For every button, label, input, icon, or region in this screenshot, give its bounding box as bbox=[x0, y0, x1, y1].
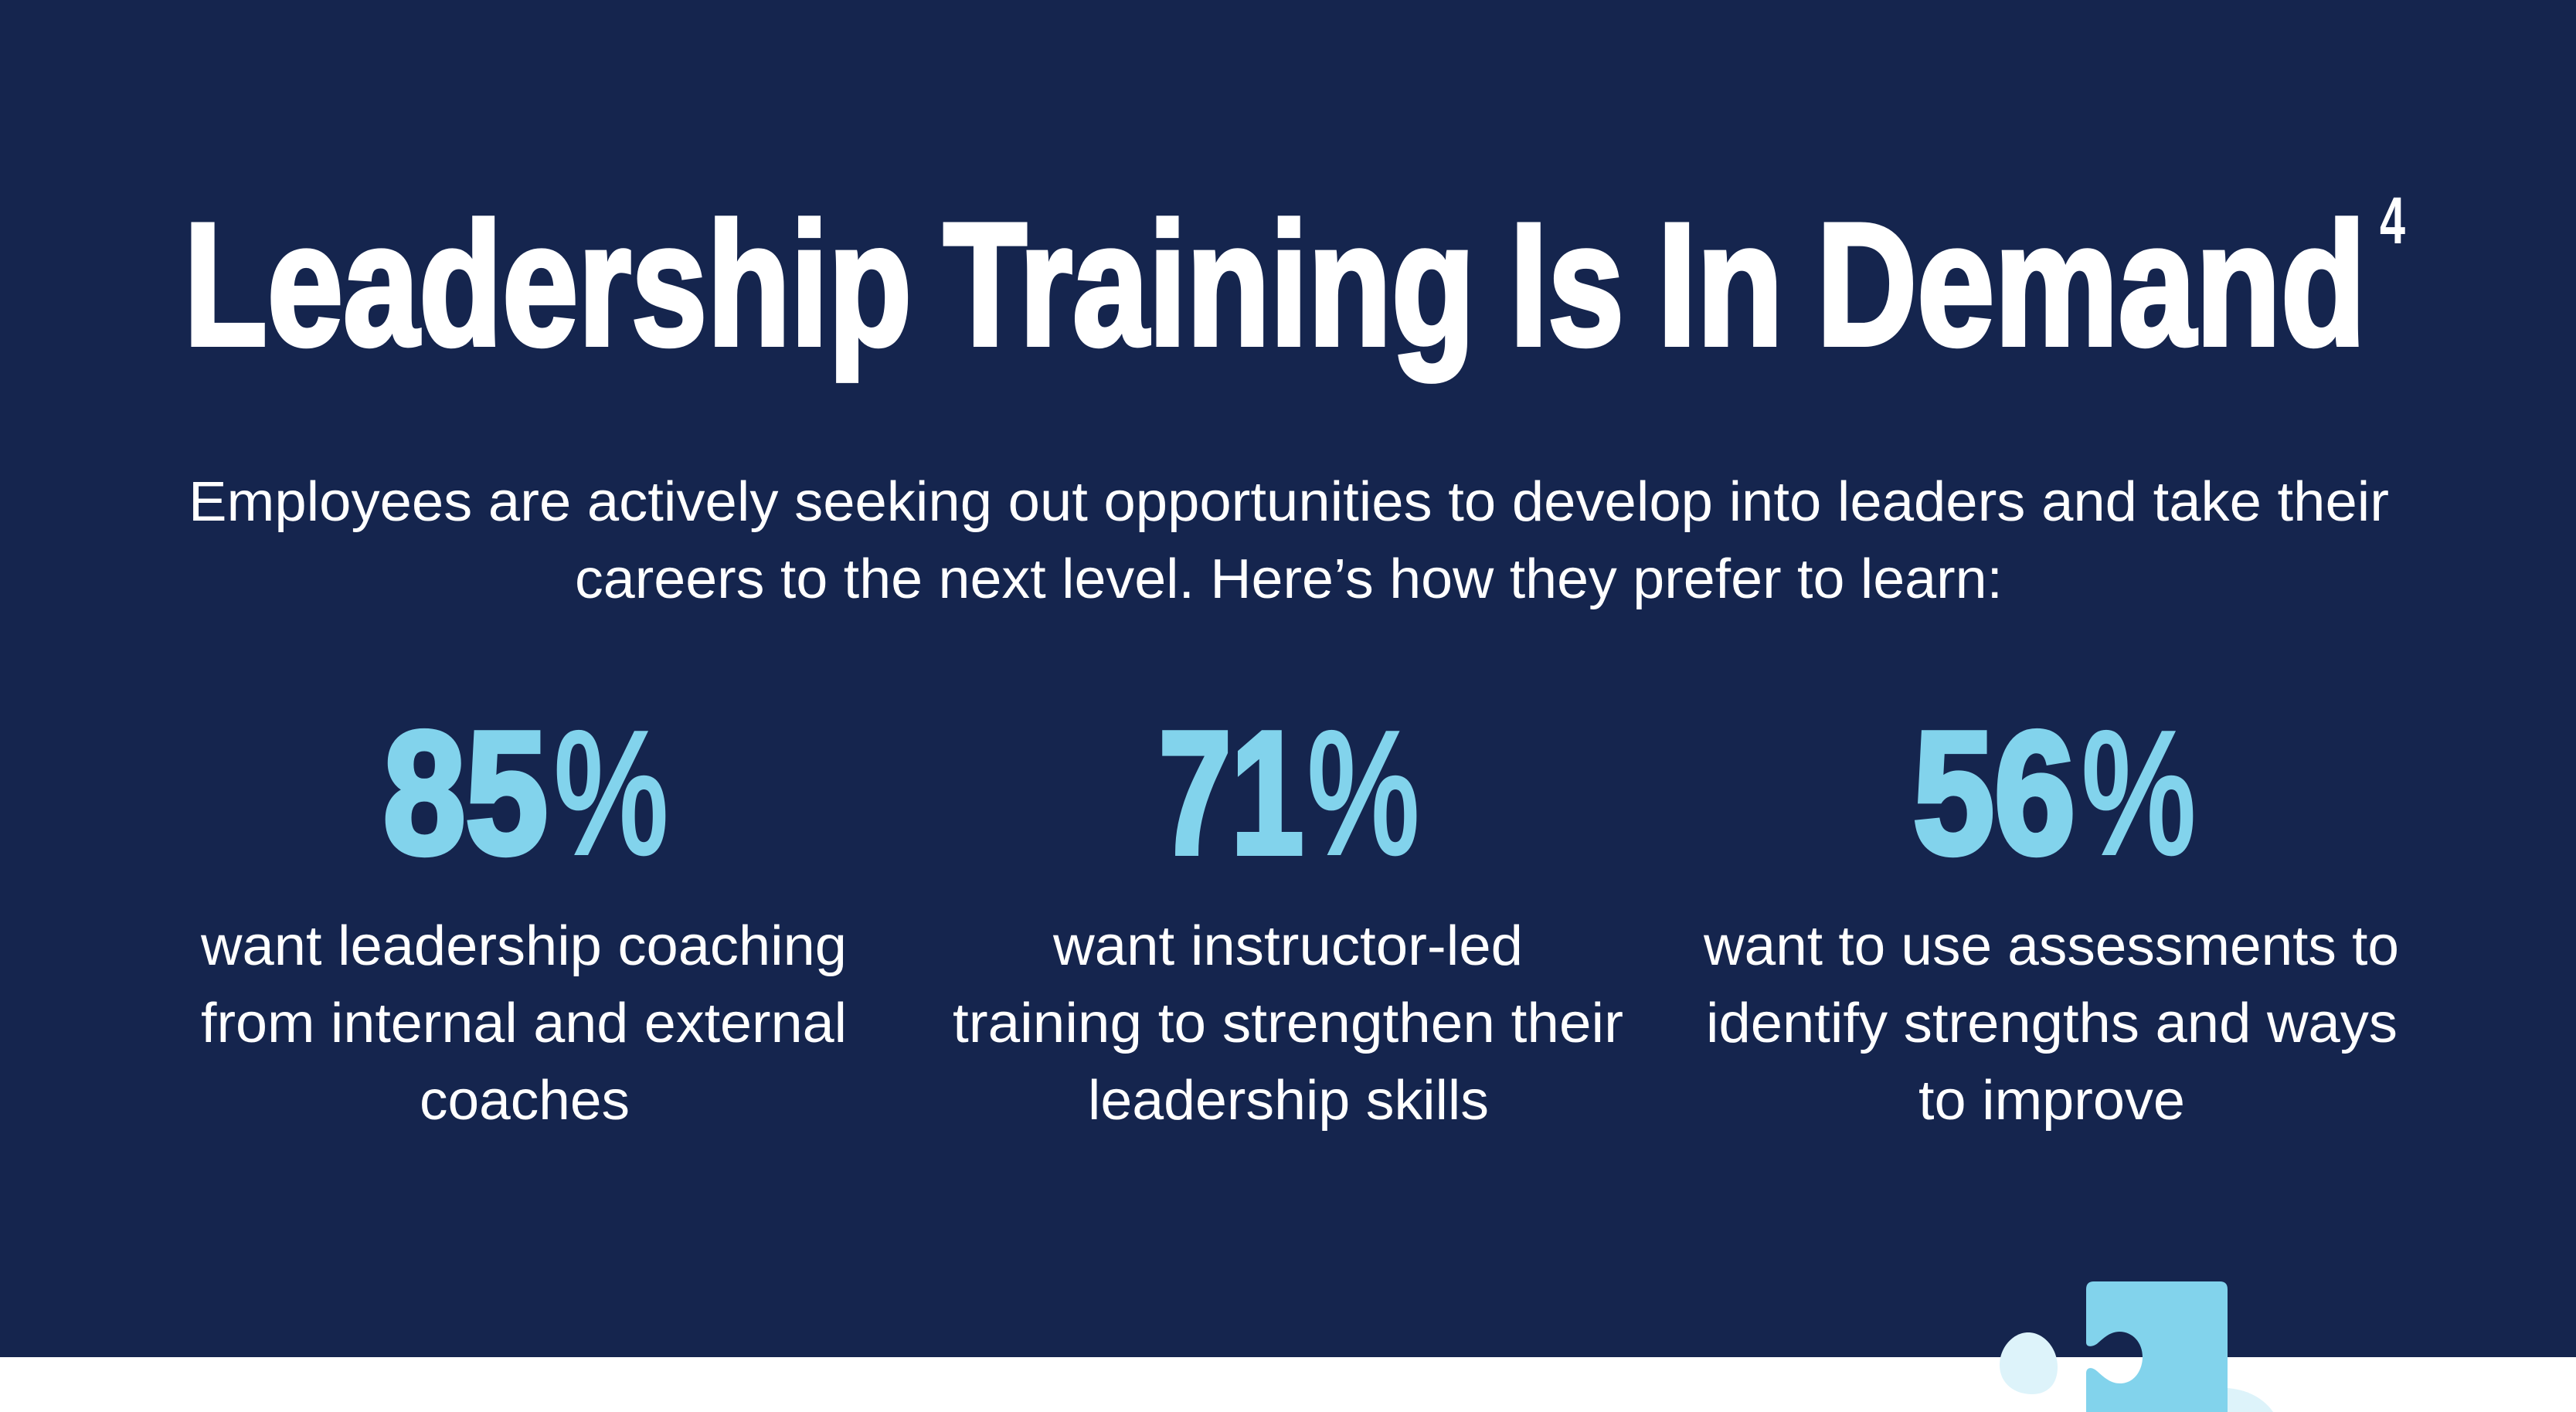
stat: 71%: want instructor-led bbox=[1052, 915, 1523, 977]
title: Leadership bbox=[184, 186, 912, 382]
title: Demand bbox=[1816, 186, 2366, 382]
stat: 56%: % bbox=[2082, 695, 2196, 890]
stat: 56%: want to use assessments to bbox=[1703, 915, 2399, 977]
stat: 85%: 85 bbox=[383, 695, 548, 890]
title bbox=[184, 184, 2405, 382]
title: In bbox=[1657, 186, 1783, 382]
stat: 71%: % bbox=[1307, 695, 1419, 890]
intro text: careers to the next level. Here’s how they prefer to learn: bbox=[575, 548, 2003, 610]
stat: 85%: from internal and external bbox=[201, 993, 847, 1054]
stat: 56%: identify strengths and ways bbox=[1706, 993, 2398, 1054]
stat: 71% bbox=[953, 695, 1623, 1132]
stat: 71%: 71 bbox=[1159, 695, 1303, 890]
stat: 56%: 56 bbox=[1913, 695, 2075, 890]
stat: 85%: want leadership coaching bbox=[200, 915, 847, 977]
stat: 71%: training to strengthen their bbox=[953, 993, 1623, 1054]
stat: 56% bbox=[1703, 695, 2399, 1132]
title: Is bbox=[1510, 186, 1624, 382]
title: 4 bbox=[2380, 184, 2405, 258]
stat: 85% bbox=[200, 695, 847, 1132]
intro text bbox=[189, 471, 2389, 610]
stat: 71%: leadership skills bbox=[1088, 1070, 1489, 1132]
icon: puzzle piece bbox=[2000, 1281, 2273, 1412]
title: Training bbox=[943, 186, 1475, 382]
stat: 85%: % bbox=[554, 695, 668, 890]
stat: 56%: to improve bbox=[1918, 1070, 2185, 1132]
stat: 85%: coaches bbox=[420, 1070, 630, 1132]
intro text: Employees are actively seeking out opportunities to develop into leaders and take their bbox=[189, 471, 2389, 533]
